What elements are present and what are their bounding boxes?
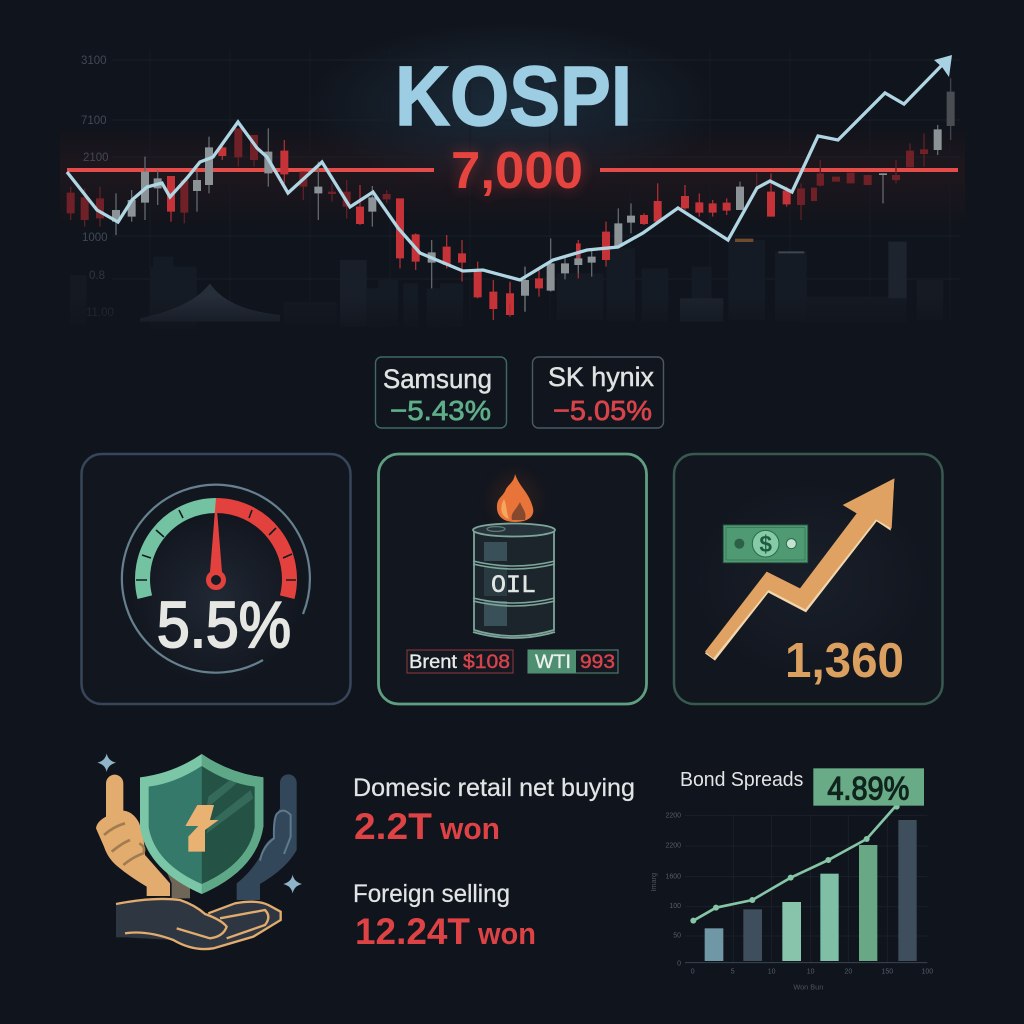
panel: exchange rate <box>674 454 942 704</box>
open hand at bottom <box>116 899 281 949</box>
y axis labels: 11.00 <box>86 307 114 319</box>
value: 12.24T won <box>355 911 536 952</box>
y axis title: Imarg <box>649 873 658 892</box>
x axis labels: 100 <box>922 968 933 975</box>
stock chip: Samsung <box>376 357 506 428</box>
chart: bond spreads <box>649 768 933 992</box>
exchange rate value: 1,360 <box>785 634 904 688</box>
y axis labels: 2100 <box>83 152 109 164</box>
skin-toned left hand <box>96 775 170 896</box>
y axis labels: 1000 <box>82 232 108 244</box>
index trend line with arrow <box>67 55 952 280</box>
skyline fade <box>40 296 990 338</box>
chart title: Bond Spreads <box>680 769 803 791</box>
title: KOSPI <box>395 49 632 143</box>
icon: rising arrow <box>705 478 894 661</box>
x axis labels <box>691 968 933 975</box>
y axis labels: 3100 <box>81 55 107 67</box>
stock chip: SK hynix <box>532 357 664 428</box>
WTI price tag: 993 <box>580 651 615 673</box>
icon: sparkle right <box>283 875 302 893</box>
WTI price tag <box>528 650 618 673</box>
text block: retail and foreign flows <box>353 774 635 952</box>
x axis labels: 10 <box>807 968 815 975</box>
WTI price tag: WTI <box>535 651 571 673</box>
y axis labels: 50 <box>673 932 681 939</box>
stock chip: Samsung: Samsung <box>383 364 492 394</box>
callout: 4.89%: 4.89% <box>827 769 909 806</box>
stock chip: SK hynix: −5.05% <box>553 395 652 426</box>
stock chip: Samsung: −5.43% <box>390 395 491 426</box>
spread trend line <box>690 804 900 924</box>
icon: dollar bill <box>723 525 808 563</box>
icon: flame <box>491 474 539 526</box>
shield <box>140 754 263 894</box>
Brent price tag <box>407 650 513 673</box>
label: foreign selling: Foreign selling <box>353 880 510 908</box>
value: 2.2T won <box>354 806 500 847</box>
barrel label: OIL <box>491 571 536 600</box>
icon: dollar bill: $ <box>759 531 772 557</box>
skyline <box>70 239 943 330</box>
red 7,000 level line <box>67 166 958 174</box>
y axis labels: 100 <box>669 903 681 910</box>
icon: bolt <box>185 805 219 852</box>
panel: gauge 5.5% <box>82 454 350 704</box>
dark right hand <box>237 774 297 900</box>
x axis labels: 150 <box>882 968 893 975</box>
y axis labels: 1600 <box>665 873 681 880</box>
y axis labels: 2200 <box>665 842 681 849</box>
gauge green arc <box>143 506 216 597</box>
panel: oil <box>378 454 646 704</box>
gauge needle <box>208 498 224 588</box>
candlesticks left <box>67 128 529 320</box>
icon: sparkle left <box>97 753 116 772</box>
y axis labels <box>81 55 114 319</box>
index value 7,000: 7,000 <box>451 142 583 200</box>
panel: KOSPI chart hero <box>40 20 990 338</box>
gauge outer ring <box>122 485 310 673</box>
icon: oil barrel <box>473 524 555 638</box>
y axis labels: 0 <box>677 961 681 968</box>
y axis labels: 7100 <box>81 115 107 127</box>
x axis labels: 5 <box>731 968 735 975</box>
wrist shadow <box>160 857 190 898</box>
y axis labels <box>665 813 681 968</box>
stock chip: SK hynix: SK hynix <box>548 362 654 392</box>
value: 2.2T won: 2.2T <box>354 806 432 847</box>
y axis labels: 0.8 <box>89 270 105 282</box>
x axis labels: 20 <box>844 968 852 975</box>
value: 2.2T won: won <box>439 811 500 846</box>
y axis labels: 2200 <box>665 813 681 820</box>
Brent price tag: Brent <box>409 651 458 673</box>
Brent price tag: $108 <box>463 651 510 673</box>
chart grid <box>112 50 960 320</box>
candlesticks right <box>507 78 955 315</box>
gauge red arc <box>216 506 289 597</box>
x axis labels: 10 <box>768 968 776 975</box>
chart backdrop glow <box>60 20 965 230</box>
x axis labels: 0 <box>691 968 695 975</box>
value: 12.24T won: won <box>477 916 536 951</box>
gauge value: 5.5% <box>157 588 291 661</box>
chart grid and axes <box>685 815 927 963</box>
x axis title: Won Bun <box>793 983 823 992</box>
index value 7,000: 7,000 <box>451 142 583 200</box>
bars <box>705 820 917 961</box>
label: domestic retail: Domesic retail net buying <box>353 774 635 802</box>
gauge ticks <box>136 510 296 580</box>
value: 12.24T won: 12.24T <box>355 911 470 952</box>
icon: hands with shield <box>96 753 302 949</box>
